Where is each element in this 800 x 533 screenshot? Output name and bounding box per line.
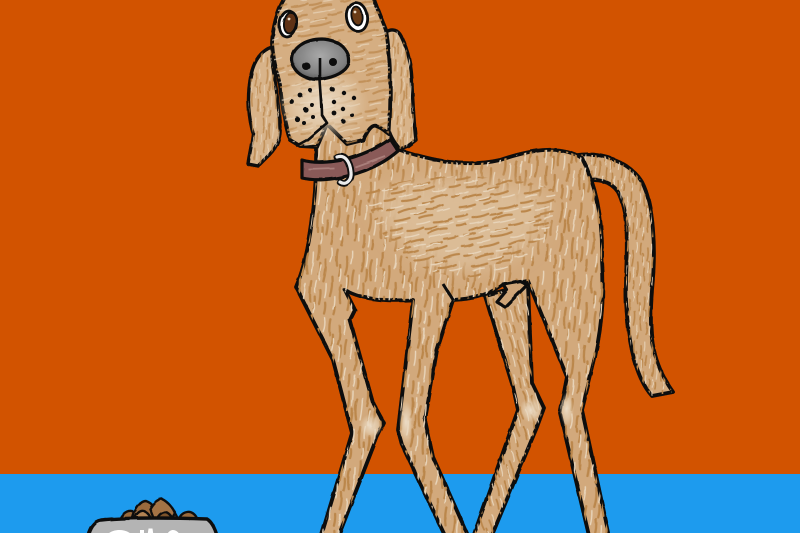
kibble: [119, 499, 198, 523]
left ear: [248, 47, 280, 166]
right ear: [386, 30, 416, 149]
collar: [302, 139, 398, 180]
knee highlights: [359, 414, 383, 438]
mouth lines: [296, 80, 327, 146]
nose: [292, 39, 349, 80]
sheath: [497, 281, 527, 307]
torso and three near legs: [296, 110, 610, 533]
torso fur: [365, 176, 555, 277]
food bowl: [87, 499, 218, 533]
far hind leg: [472, 285, 544, 533]
torso soft patch: [375, 181, 547, 270]
floor: [0, 474, 800, 533]
belly crease: [443, 284, 453, 300]
left eye: [278, 10, 298, 38]
collar ring highlight: [337, 156, 351, 183]
muzzle patch: [277, 66, 369, 142]
dog: [248, 0, 673, 533]
head: [272, 0, 390, 147]
tail: [578, 154, 673, 396]
bowl label: [106, 529, 181, 533]
collar ring: [337, 156, 351, 183]
whisker spots: [290, 87, 356, 125]
bowl body: [87, 518, 218, 533]
right eye: [344, 1, 370, 33]
